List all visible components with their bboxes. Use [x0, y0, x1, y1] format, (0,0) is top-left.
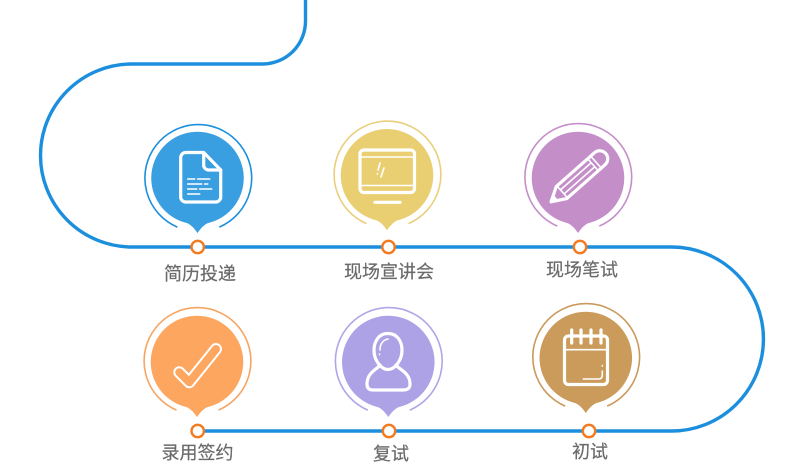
- bubble: [532, 132, 624, 233]
- label: 录用签约: 录用签约: [162, 443, 234, 463]
- step: 现场笔试: [525, 124, 632, 233]
- icon: notepad: [564, 330, 608, 384]
- node: 现场宣讲会: [382, 241, 395, 253]
- ring: [335, 308, 442, 410]
- step: 录用签约: [144, 308, 251, 417]
- icon: check mark: [179, 349, 216, 382]
- label: 复试: 复试: [373, 444, 409, 464]
- node: 录用签约: [192, 425, 204, 437]
- ring: [144, 308, 251, 410]
- node: 现场笔试: [574, 241, 586, 253]
- step: 初试: [533, 304, 640, 413]
- icon: monitor: [360, 150, 414, 202]
- label: 现场宣讲会: 现场宣讲会: [344, 262, 434, 282]
- ring: [145, 125, 252, 227]
- bubble: [341, 129, 433, 230]
- node: 复试: [383, 425, 395, 437]
- bubble: [151, 132, 244, 233]
- label: 现场笔试: 现场笔试: [546, 260, 618, 280]
- icon: document: [181, 152, 221, 202]
- step: 复试: [335, 308, 442, 417]
- icon: pencil: [546, 147, 611, 208]
- icon: person: [367, 334, 410, 390]
- ring: [334, 121, 441, 224]
- step: 现场宣讲会: [334, 121, 441, 230]
- ring: [533, 304, 640, 406]
- ring: [525, 124, 632, 226]
- label: 初试: 初试: [572, 442, 608, 462]
- bubble: [151, 316, 243, 417]
- step: 简历投递: [145, 125, 252, 233]
- bubble: [540, 312, 632, 413]
- label: 简历投递: 简历投递: [164, 264, 236, 284]
- bubble: [342, 316, 435, 417]
- node: 简历投递: [192, 241, 204, 253]
- node: 初试: [583, 425, 595, 437]
